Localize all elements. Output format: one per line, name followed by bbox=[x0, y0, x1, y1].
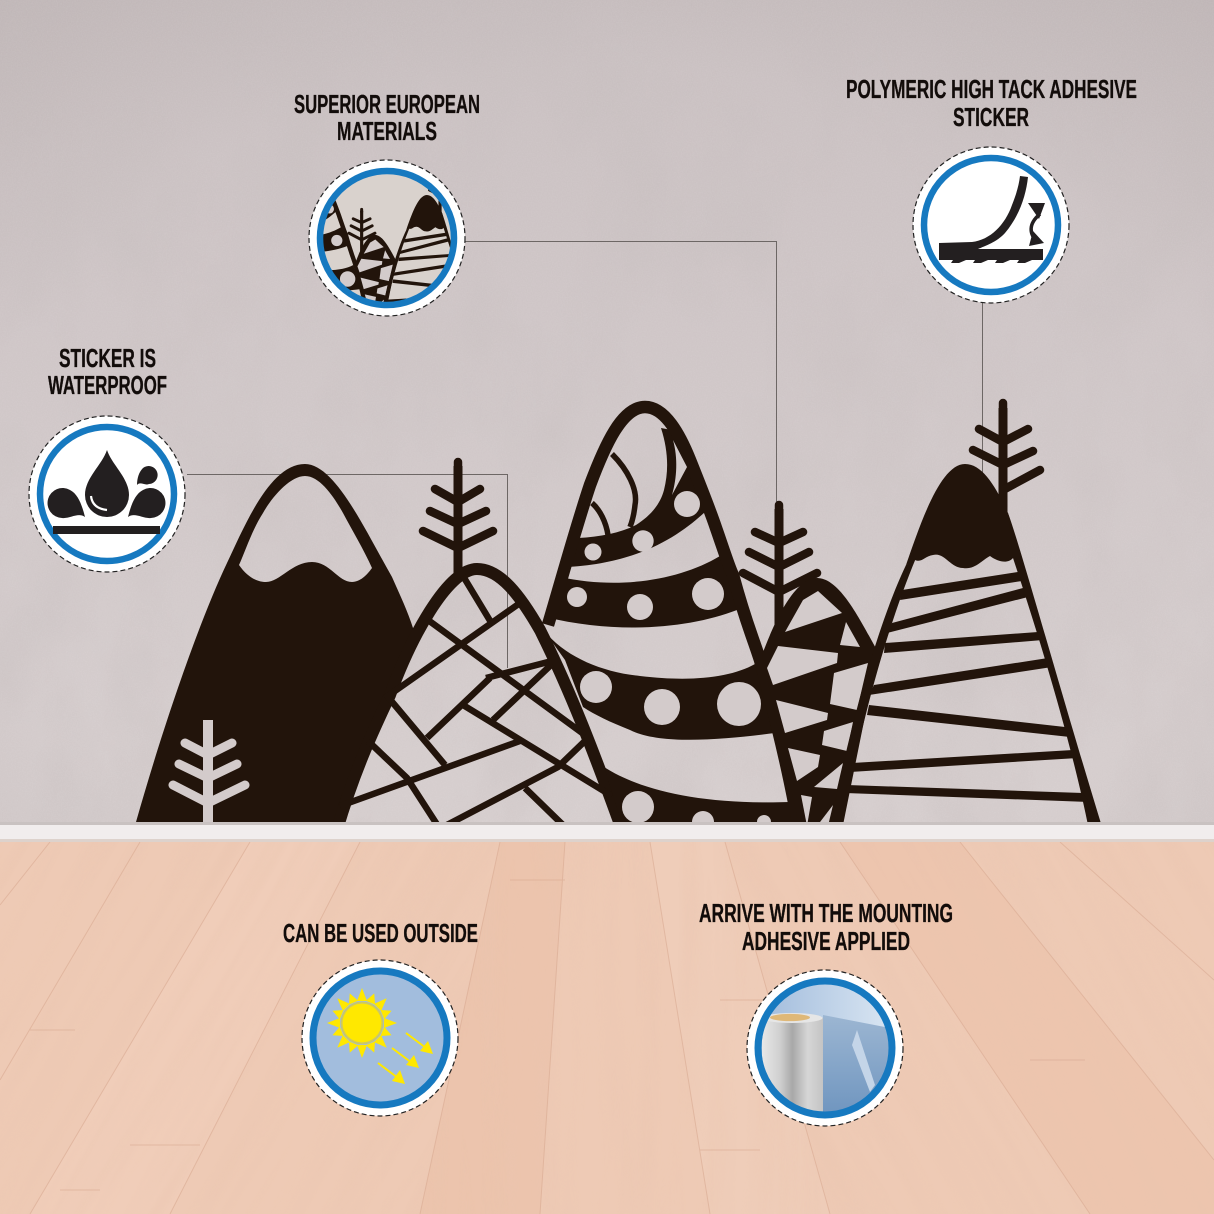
heading: waterproof: WATERPROOF bbox=[48, 370, 167, 400]
heading: superior european materials: SUPERIOR EUROPEAN bbox=[294, 89, 480, 119]
badge: mounting adhesive roll bbox=[747, 970, 903, 1126]
heading: superior european materials: MATERIALS bbox=[337, 116, 437, 146]
heading: arrive with adhesive: ARRIVE WITH THE MOUNTING bbox=[699, 898, 953, 928]
mountain 1 solid with snow cap bbox=[136, 464, 418, 830]
baseboard bbox=[0, 822, 1214, 842]
icon: sun bbox=[327, 988, 397, 1058]
heading: polymeric adhesive: STICKER bbox=[953, 102, 1029, 132]
wall background bbox=[0, 0, 1214, 824]
heading: waterproof bbox=[48, 343, 167, 400]
badge: polymeric adhesive bbox=[913, 147, 1069, 303]
mountain 3 patterned bbox=[540, 407, 808, 833]
icon: peeling tape bbox=[939, 176, 1043, 263]
tree on mountain 1 bbox=[173, 720, 245, 826]
heading: arrive with adhesive: ADHESIVE APPLIED bbox=[742, 926, 910, 956]
mountain wall decal bbox=[136, 403, 1103, 833]
heading: arrive with adhesive bbox=[699, 898, 953, 956]
heading: can be used outside: CAN BE USED OUTSIDE bbox=[283, 918, 478, 948]
icon: sun ray arrows bbox=[378, 1033, 433, 1084]
badge: outside sun bbox=[302, 960, 458, 1116]
mountain 5 ladder bbox=[830, 464, 1103, 830]
mountain 3 dots bbox=[567, 491, 771, 833]
icon: flex arrow bbox=[1028, 203, 1045, 246]
heading: polymeric adhesive bbox=[846, 74, 1137, 132]
floor bbox=[0, 842, 1214, 1214]
badge: waterproof bbox=[29, 416, 185, 572]
heading: waterproof: STICKER IS bbox=[59, 343, 156, 373]
icon: film roll bbox=[762, 1013, 823, 1112]
mountain 4 triangles bbox=[762, 578, 878, 830]
mountain 2 lattice bbox=[337, 569, 622, 830]
tree on mountain 2 bbox=[423, 462, 493, 575]
tree on mountain 5 bbox=[973, 403, 1040, 520]
icon: water drops bbox=[48, 450, 165, 534]
tree on mountain 4 bbox=[743, 505, 817, 625]
badge: materials bbox=[308, 159, 466, 317]
heading: superior european materials bbox=[294, 89, 480, 146]
callout connector lines bbox=[187, 242, 982, 668]
